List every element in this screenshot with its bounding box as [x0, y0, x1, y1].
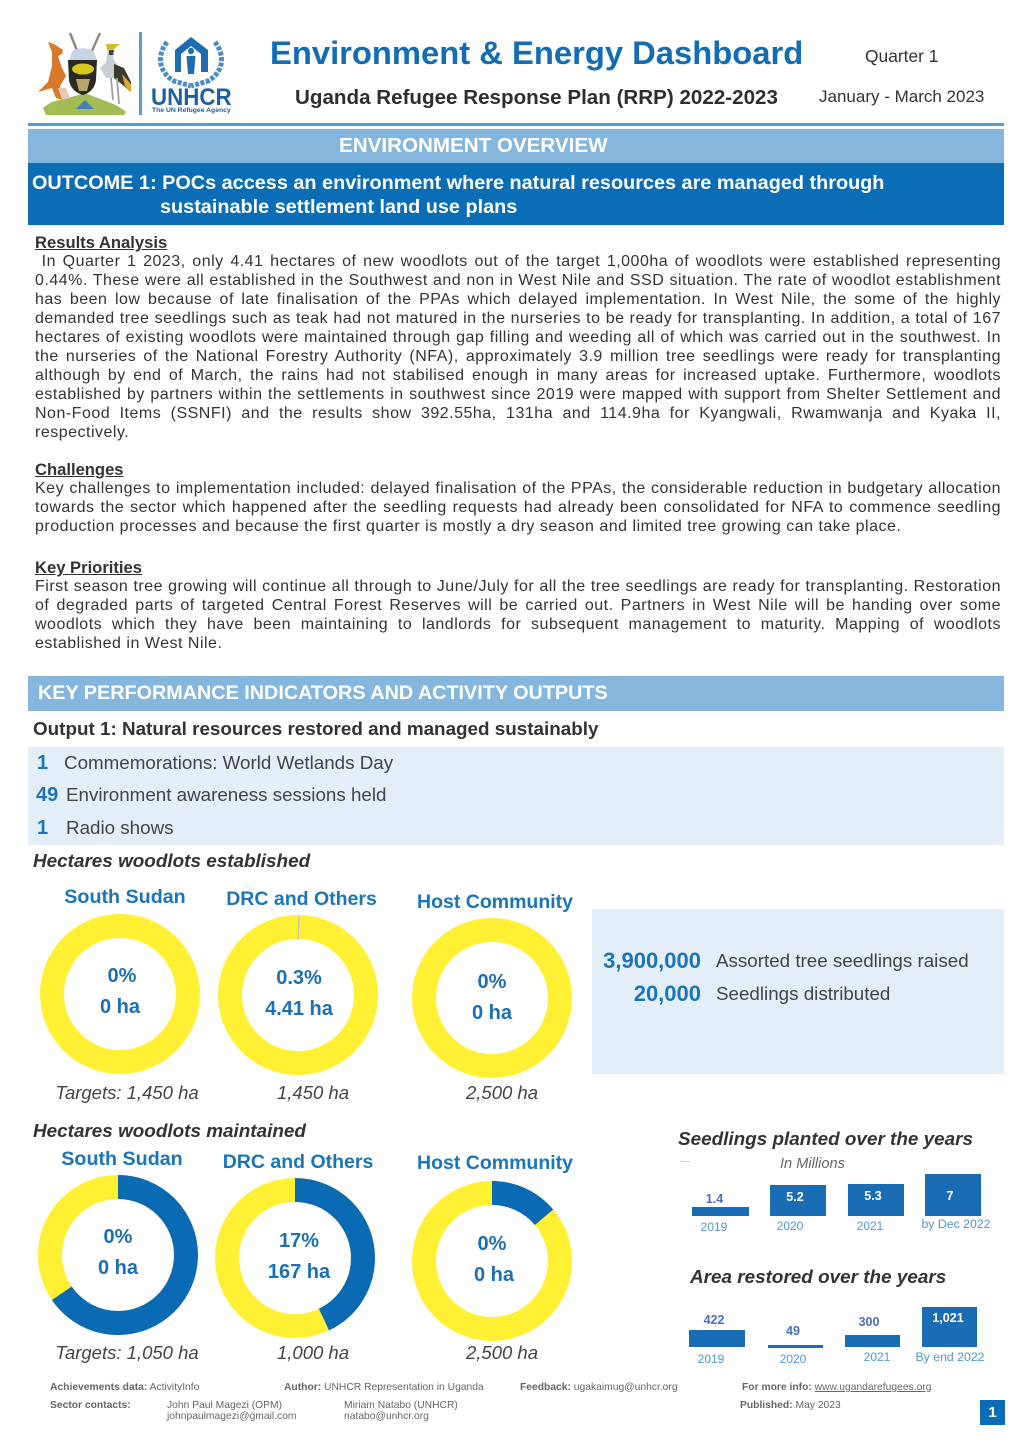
- chart: maintained DRC and Others: 1,000 ha: [277, 1342, 349, 1363]
- chart: maintained South Sudan: Targets: 1,050 ha: [55, 1342, 199, 1363]
- panel: KPI list: Commemorations: World Wetlands Day: [64, 752, 393, 773]
- chart: area restored over the years: 300: [859, 1315, 879, 1329]
- heading: hectares maintained: Hectares woodlots maintained: [33, 1121, 306, 1142]
- footer: feedback: Feedback: ugakaimug@unhcr.org: [520, 1382, 678, 1393]
- chart: maintained South Sudan: 0 ha: [98, 1257, 138, 1279]
- chart: maintained Host Community: Host Community: [417, 1152, 573, 1174]
- text block: results analysis: the nurseries of the National Forestry Authority (NFA), approximately 3.9 million tree seedlings were ready for transplanting: [35, 348, 1001, 365]
- KPI: awareness sessions: [36, 784, 386, 806]
- chart: area restored over the years: 2021: [864, 1350, 890, 1364]
- chart: established DRC and Others: 4.41 ha: [265, 998, 333, 1020]
- chart: seedlings planted over the years: 5.3: [864, 1189, 882, 1203]
- stat: seedlings distributed: Seedlings distributed: [716, 983, 890, 1004]
- stat: seedlings distributed: 20,000: [634, 981, 701, 1006]
- stat: seedlings raised: Assorted tree seedlings raised: [716, 950, 969, 971]
- chart: maintained Host Community: 0 ha: [474, 1264, 514, 1286]
- chart: established Host Community: Host Community: [417, 891, 573, 913]
- panel: KPI list: Environment awareness sessions held: [66, 784, 386, 805]
- chart: area restored over the years: Area restored over the years: [690, 1267, 946, 1288]
- footer: UNHCR contact: natabo@unhcr.org: [344, 1411, 429, 1422]
- footer: [50, 1382, 931, 1422]
- chart: established South Sudan: South Sudan: [64, 886, 186, 908]
- text block: key priorities: Key Priorities: [35, 558, 142, 577]
- text block: results analysis: [35, 233, 1001, 441]
- text block: key priorities: established in West Nile.: [35, 635, 222, 652]
- chart: seedlings planted over the years: 5.2: [786, 1190, 804, 1204]
- text block: key priorities: of degraded parts of targeted Central Forest Reserves will be carried out. Partners in West Nile will be handing over some: [35, 597, 1001, 614]
- footer: OPM contact: [166, 1400, 297, 1422]
- subtitle: Uganda Refugee Response Plan (RRP) 2022-2023: [295, 86, 778, 109]
- stat: seedlings distributed: [634, 981, 890, 1006]
- chart: maintained DRC and Others: DRC and Others: [223, 1151, 373, 1173]
- text block: results analysis: Results Analysis: [35, 233, 167, 252]
- KPI: commemorations: [37, 752, 394, 774]
- footer: author: Author: UNHCR Representation in Uganda: [284, 1382, 484, 1393]
- output heading: Output 1: Natural resources restored and managed sustainably: [33, 718, 598, 739]
- chart: maintained DRC and Others: 17%: [279, 1230, 319, 1252]
- page number: [980, 1400, 1005, 1425]
- page number: 1: [988, 1404, 997, 1421]
- text block: results analysis: In Quarter 1 2023, only 4.41 hectares of new woodlots out of the target 1,000ha of woodlots were established representing: [42, 253, 1001, 270]
- footer: more info: For more info: www.ugandarefugees.org: [742, 1382, 931, 1393]
- footer: sector contacts: Sector contacts:: [50, 1400, 131, 1411]
- icon: UNHCR logo: The UN Refugee Agency: [152, 107, 231, 114]
- chart: seedlings planted over the years: 2021: [857, 1219, 883, 1233]
- KPI: commemorations: 1: [37, 752, 48, 774]
- chart: maintained DRC and Others: [215, 1151, 375, 1363]
- chart: established South Sudan: Targets: 1,450 ha: [55, 1082, 199, 1103]
- section band: key performance indicators: KEY PERFORMANCE INDICATORS AND ACTIVITY OUTPUTS: [38, 682, 608, 704]
- footer: OPM contact: John Paul Magezi (OPM): [167, 1400, 282, 1411]
- text block: results analysis: has been low because of late finalisation of the PPAs which delayed implementation. In West Nile, the some of the highly: [35, 291, 1001, 308]
- chart: seedlings planted over the years: In Millions: [780, 1156, 845, 1172]
- chart: maintained Host Community: [412, 1152, 573, 1363]
- title: Environment & Energy Dashboard: [270, 34, 803, 71]
- text block: challenges: Key challenges to implementation included: delayed finalisation of the PPAs, the considerable reduction in budgetary allocation: [35, 480, 1001, 497]
- chart: area restored over the years: 2020: [780, 1352, 806, 1366]
- chart: maintained South Sudan: [38, 1148, 199, 1363]
- logo divider: [139, 32, 142, 115]
- chart: maintained Host Community: 0%: [478, 1233, 506, 1255]
- heading: hectares established: Hectares woodlots established: [33, 851, 310, 872]
- chart: maintained South Sudan: South Sudan: [61, 1148, 183, 1170]
- chart: established South Sudan: [40, 886, 200, 1103]
- text block: challenges: production processes and because the first quarter is mostly a dry season and limited tree growing can take place.: [35, 518, 901, 535]
- text block: key priorities: [35, 558, 1001, 652]
- text block: results analysis: 0.44%. These were all established in the Southwest and non in West Nile and SSD situation. The rate of woodlot establishment: [35, 272, 1001, 289]
- footer: UNHCR contact: [344, 1400, 458, 1422]
- text block: key priorities: woodlots which they have been maintaining to landlords for subsequent management to maturity. Mapping of woodlots: [35, 616, 1001, 633]
- text block: challenges: towards the sector which happened after the seedling requests had already been consolidated for NFA to commence seedling: [35, 499, 1001, 516]
- chart: maintained Host Community: 2,500 ha: [466, 1342, 538, 1363]
- text block: challenges: [35, 460, 1001, 535]
- chart: seedlings planted over the years: 2020: [777, 1219, 803, 1233]
- chart: area restored over the years: 1,021: [932, 1311, 964, 1325]
- panel: seedling stats: [592, 909, 1004, 1074]
- footer: OPM contact: johnpaulmagezi@gmail.com: [167, 1411, 297, 1422]
- KPI: radio shows: [37, 817, 174, 839]
- chart: seedlings planted over the years: Seedlings planted over the years: [678, 1129, 973, 1150]
- chart: established Host Community: 2,500 ha: [466, 1082, 538, 1103]
- panel: KPI list: Radio shows: [66, 817, 174, 838]
- chart: established South Sudan: 0 ha: [100, 996, 140, 1018]
- text block: results analysis: respectively.: [35, 424, 129, 441]
- chart: seedlings planted over the years: 1.4: [706, 1192, 723, 1206]
- chart: seedlings planted over the years: [678, 1129, 991, 1234]
- chart: area restored over the years: 2019: [698, 1352, 724, 1366]
- panel: KPI list: [28, 747, 1004, 845]
- quarter label: Quarter 1: [865, 46, 938, 66]
- outcome band: [28, 163, 1004, 225]
- chart: seedlings planted over the years: 2019: [701, 1220, 727, 1234]
- outcome band: OUTCOME 1: POCs access an environment where natural resources are managed through: [32, 172, 884, 194]
- text block: results analysis: Non-Food Items (SSNFI) and the results show 392.55ha, 131ha and 114.9ha for Kyangwali, Rwamwanja and Kyaka II,: [35, 405, 1001, 422]
- text block: results analysis: hectares of existing woodlots were maintained through gap filling and weeding all of which was carried out in the southwest. In: [35, 329, 1001, 346]
- outcome band: sustainable settlement land use plans: [160, 196, 517, 218]
- chart: established DRC and Others: DRC and Others: [226, 888, 377, 910]
- chart: area restored over the years: By end 2022: [915, 1350, 985, 1364]
- chart: area restored over the years: 49: [786, 1324, 800, 1338]
- icon: UNHCR logo: UNHCR: [151, 84, 232, 111]
- chart: seedlings planted over the years: 7: [947, 1189, 953, 1203]
- text block: challenges: Challenges: [35, 460, 124, 479]
- chart: established South Sudan: 0%: [108, 965, 136, 987]
- KPI: awareness sessions: 49: [36, 784, 58, 806]
- chart: area restored over the years: 422: [704, 1313, 724, 1327]
- chart: maintained DRC and Others: 167 ha: [268, 1261, 330, 1283]
- text block: results analysis: demanded tree seedlings such as teak had not matured in the nurseries to be ready for transplanting. In addition, a total of 167: [35, 310, 1001, 327]
- chart: maintained South Sudan: 0%: [104, 1226, 132, 1248]
- section band: environment overview: [28, 129, 1004, 163]
- chart: established DRC and Others: 1,450 ha: [277, 1082, 349, 1103]
- footer: published: Published: May 2023: [740, 1400, 841, 1411]
- chart: established Host Community: 0%: [478, 971, 506, 993]
- stat: seedlings raised: [603, 948, 969, 973]
- chart: seedlings planted over the years: by Dec 2022: [921, 1217, 991, 1231]
- chart: established Host Community: 0 ha: [472, 1002, 512, 1024]
- KPI: radio shows: 1: [37, 817, 48, 839]
- icon: Uganda coat of arms: [38, 32, 131, 115]
- text block: key priorities: First season tree growing will continue all through to June/July for all the tree seedlings are ready for transplanting. Restoration: [35, 578, 1001, 595]
- chart: established DRC and Others: [218, 888, 378, 1103]
- footer: UNHCR contact: Miriam Natabo (UNHCR): [344, 1400, 458, 1411]
- period label: January - March 2023: [819, 87, 984, 106]
- chart: established DRC and Others: 0.3%: [276, 967, 322, 989]
- stat: seedlings raised: 3,900,000: [603, 948, 701, 973]
- chart: established Host Community: [412, 891, 573, 1103]
- chart: area restored over the years: [689, 1267, 985, 1366]
- section band: key performance indicators: [28, 676, 1004, 711]
- text block: results analysis: although by end of March, the rains had not stabilised enough in many areas for increased uptake. Furthermore, woodlots: [35, 367, 1001, 384]
- text block: results analysis: established by partners within the settlements in southwest since 2019 were mapped with support from Shelter Settlement and: [35, 386, 1001, 403]
- footer: achievements data: Achievements data: ActivityInfo: [50, 1382, 199, 1393]
- section band: environment overview: ENVIRONMENT OVERVIEW: [339, 134, 608, 157]
- icon: UNHCR logo: [151, 37, 232, 114]
